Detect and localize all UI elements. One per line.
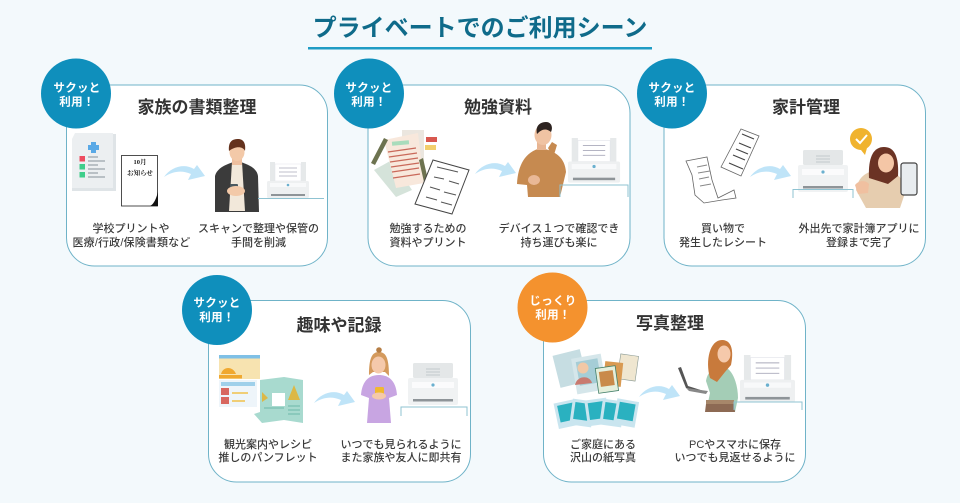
arrow bbox=[164, 165, 205, 180]
arrow bbox=[750, 165, 791, 180]
heading: 写真整理 bbox=[636, 314, 704, 333]
text: left caption: 発生したレシート bbox=[679, 235, 767, 249]
badge: じっくり利用 bbox=[518, 272, 588, 342]
text: right caption: また家族や友人に即共有 bbox=[340, 450, 462, 464]
badge: サクッと利用: 利用！ bbox=[351, 94, 387, 108]
arrow bbox=[314, 391, 355, 406]
text: left caption: 資料やプリント bbox=[390, 235, 466, 249]
text: left caption: 学校プリントや bbox=[92, 221, 170, 235]
badge: サクッと利用 bbox=[41, 58, 111, 128]
card frame bbox=[664, 85, 926, 266]
text: left caption bbox=[218, 437, 318, 464]
icon: study papers bbox=[371, 130, 469, 214]
badge: サクッと利用 bbox=[334, 58, 404, 128]
card frame bbox=[544, 300, 806, 482]
heading: 家計管理 bbox=[772, 97, 840, 117]
heading: 家族の書類整理 bbox=[138, 97, 256, 117]
arrow bbox=[639, 385, 680, 400]
text: left caption: 推しのパンフレット bbox=[218, 450, 318, 464]
table line bbox=[560, 185, 628, 197]
icon: woman with smartphone bbox=[361, 347, 397, 423]
text: right caption: デバイス１つで確認でき bbox=[499, 221, 619, 235]
table line bbox=[793, 190, 853, 198]
badge: サクッと利用 bbox=[637, 58, 707, 128]
card frame bbox=[368, 85, 630, 266]
text: left caption: 観光案内やレシピ bbox=[224, 437, 312, 451]
arrow bbox=[475, 162, 516, 177]
icon: scanner bbox=[740, 355, 795, 402]
text: right caption: 手間を削減 bbox=[231, 235, 286, 249]
badge: じっくり利用: じっくり bbox=[529, 294, 577, 308]
heading: 勉強資料 bbox=[464, 98, 532, 117]
card frame bbox=[66, 85, 328, 266]
text: left caption bbox=[570, 437, 636, 464]
panel: 家計管理 bbox=[637, 58, 926, 266]
title underline bbox=[308, 47, 652, 50]
card frame bbox=[208, 300, 470, 482]
table line bbox=[258, 198, 324, 200]
text: left caption: ご家庭にある bbox=[570, 437, 636, 451]
text: right caption: 持ち運びも楽に bbox=[520, 235, 598, 249]
icon: school notice: 10月 bbox=[134, 158, 146, 166]
icon: scanner bbox=[408, 363, 458, 405]
text: right caption bbox=[499, 221, 619, 249]
panel: 勉強資料 bbox=[334, 58, 630, 266]
icon: school notice: お知らせ bbox=[127, 168, 153, 177]
title: プライベートでのご利用シーン bbox=[313, 14, 647, 42]
text: left caption bbox=[73, 221, 190, 249]
panel: 趣味や記録 bbox=[182, 275, 470, 482]
icon: scanner bbox=[568, 138, 620, 183]
table line bbox=[734, 402, 802, 410]
text: right caption: 外出先で家計簿アプリに bbox=[798, 221, 920, 235]
icon: woman with laptop bbox=[678, 340, 738, 412]
text: left caption: 医療/行政/保険書類など bbox=[73, 235, 190, 249]
icon: man with phone bbox=[215, 139, 259, 212]
text: right caption: いつでも見返せるように bbox=[674, 451, 796, 464]
icon: man thinking bbox=[517, 122, 566, 197]
icon: medical documents bbox=[72, 133, 116, 191]
text: left caption: 勉強するための bbox=[390, 221, 466, 235]
icon: leaflets bbox=[219, 355, 260, 407]
icon: scanner bbox=[267, 162, 309, 198]
text: right caption bbox=[798, 221, 920, 249]
text: right caption bbox=[198, 221, 319, 249]
badge: じっくり利用: 利用！ bbox=[535, 308, 571, 322]
badge: サクッと利用: サクッと bbox=[193, 296, 241, 310]
icon: woman with phone bbox=[855, 147, 917, 208]
text: right caption: 登録まで完了 bbox=[826, 235, 892, 249]
panel: 写真整理 bbox=[518, 272, 806, 482]
text: left caption bbox=[390, 221, 466, 249]
badge: サクッと利用: 利用！ bbox=[199, 310, 235, 324]
table line bbox=[401, 407, 467, 416]
icon: scanner bbox=[798, 150, 848, 192]
text: right caption: スキャンで整理や保管の bbox=[198, 221, 319, 235]
badge: サクッと利用: サクッと bbox=[53, 82, 101, 94]
text: right caption: PCやスマホに保存 bbox=[689, 437, 781, 451]
panel: 家族の書類整理 bbox=[41, 58, 328, 266]
icon: receipts bbox=[686, 129, 759, 203]
text: right caption bbox=[340, 438, 462, 464]
text: right caption bbox=[674, 437, 796, 464]
badge: サクッと利用: サクッと bbox=[648, 82, 696, 94]
text: right caption: いつでも見られるように bbox=[340, 438, 462, 451]
badge: サクッと利用 bbox=[182, 275, 252, 345]
text: left caption bbox=[679, 221, 767, 249]
icon: check bubble bbox=[850, 128, 872, 155]
heading: 趣味や記録 bbox=[296, 316, 382, 335]
badge: サクッと利用: 利用！ bbox=[59, 94, 95, 108]
icon: brochure bbox=[254, 377, 303, 423]
badge: サクッと利用: サクッと bbox=[345, 82, 393, 94]
text: left caption: 沢山の紙写真 bbox=[570, 450, 636, 464]
text: left caption: 買い物で bbox=[701, 221, 745, 235]
icon: printed photos bbox=[553, 349, 639, 429]
badge: サクッと利用: 利用！ bbox=[654, 94, 690, 108]
icon: school notice bbox=[122, 156, 158, 206]
